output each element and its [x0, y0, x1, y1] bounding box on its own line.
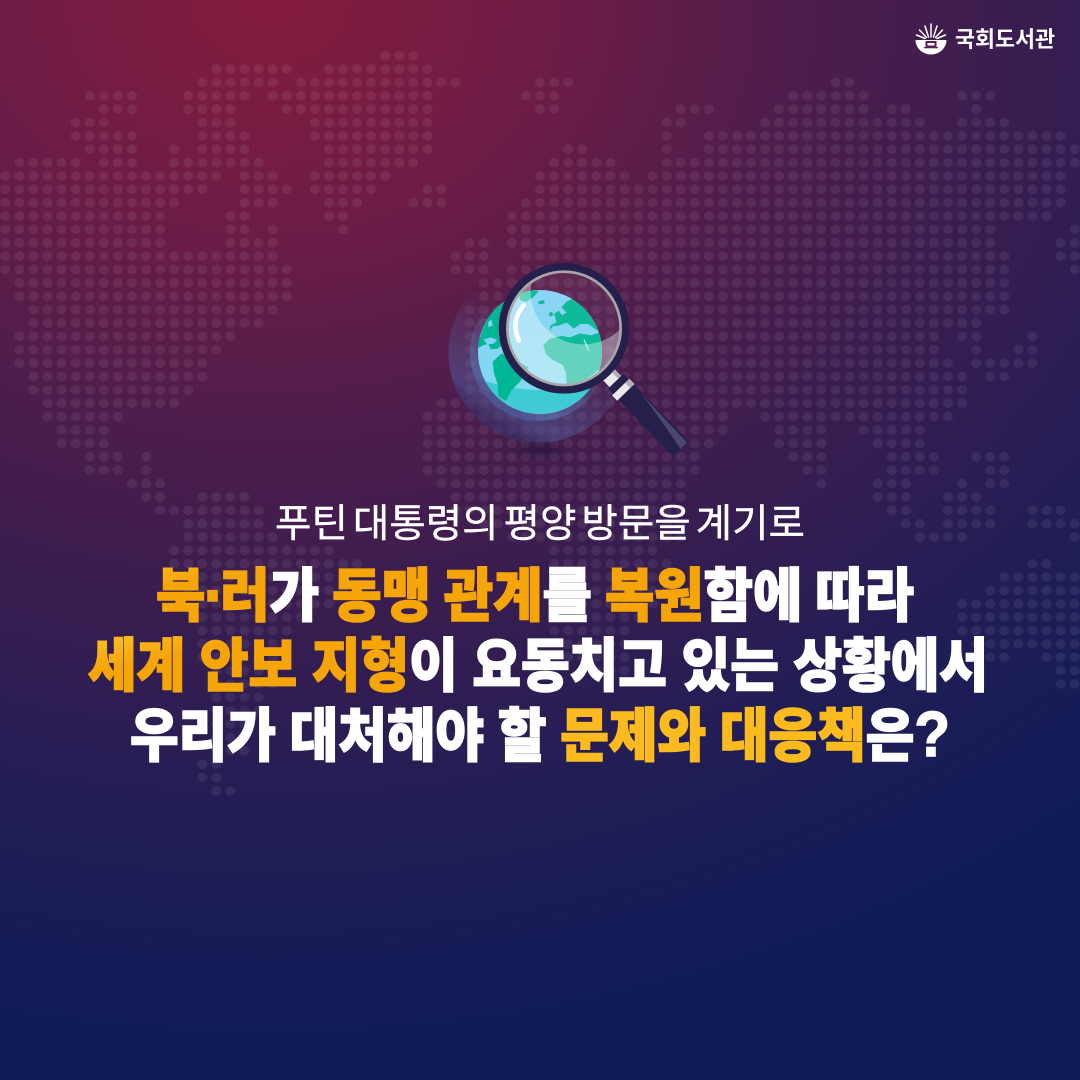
logo wordmark: 국회도서관 [955, 27, 1055, 52]
handle collar [612, 379, 634, 401]
handle grip [608, 374, 689, 457]
icon: library sunburst emblem [916, 24, 946, 54]
continents: South America [493, 353, 528, 401]
subtitle: 푸틴 대통령의 평양 방문을 계기로 [275, 503, 805, 546]
headline line 1: 가 동맹 관계를 복원함에 따라 [270, 564, 931, 629]
headline line 1: 러 [220, 564, 270, 629]
Red Sea [584, 339, 589, 351]
magnifier handle [598, 364, 690, 458]
headline line 1: · [203, 556, 225, 634]
continents: Europe and Asia [549, 299, 598, 330]
headline line 2: 세계 안보 지형이 요동치고 있는 상황에서 [88, 634, 988, 699]
lens tint [508, 273, 620, 384]
lens highlight [515, 305, 524, 341]
continents: Africa [543, 332, 602, 384]
British Isles [549, 311, 553, 317]
dotted world map background [5, 56, 1075, 791]
handle neck [601, 367, 622, 388]
magnifier ring [503, 267, 625, 389]
glow ring: outer [448, 263, 628, 443]
glow ring: inner [470, 284, 607, 421]
headline [88, 556, 988, 770]
logo: National Assembly Library [916, 24, 1055, 54]
globe [477, 288, 607, 417]
magnifier inner rim [507, 272, 621, 385]
continents: Iceland [538, 300, 545, 304]
handle sheen [633, 393, 688, 449]
headline line 3: 우리가 대처해야 할 문제와 대응책은? [130, 698, 950, 770]
continents: North America [478, 302, 504, 350]
lake holes [483, 319, 497, 345]
ocean [477, 288, 603, 415]
illustration: globe under magnifying glass [448, 263, 690, 463]
continents: Greenland [519, 291, 539, 302]
headline line 1: 북 [156, 556, 270, 634]
floor shadow [507, 437, 574, 463]
ocean lower cap [485, 381, 590, 414]
